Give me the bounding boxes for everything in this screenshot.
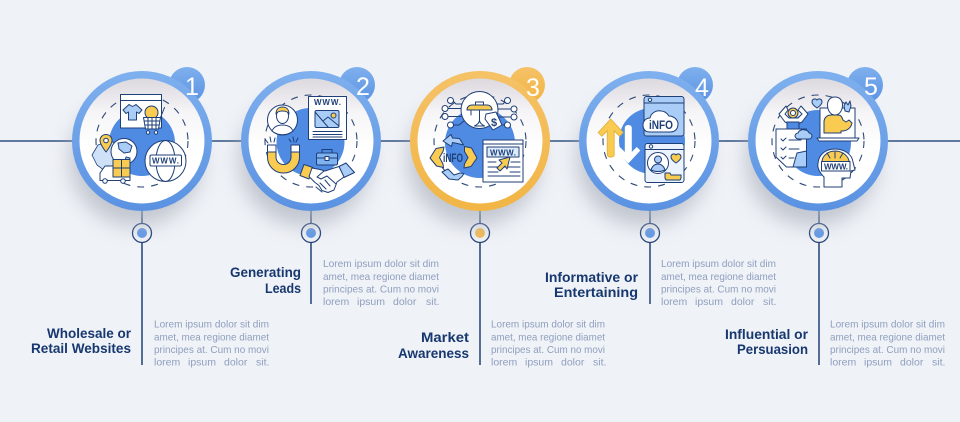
icon: map, pin and delivery truck: [92, 134, 137, 183]
step 3 body text: amet, mea regione diamet: [491, 332, 605, 344]
step 5 heading: [725, 326, 809, 357]
step 1 body text: [154, 318, 269, 368]
step 1: wholesale or retail websites: [31, 67, 269, 368]
step 1 body text: lorem: [154, 356, 181, 368]
step 3 body text: lorem: [491, 356, 518, 368]
step 2 circle: 2: [356, 73, 370, 101]
step 4 body text: principes at. Cum no movi: [661, 284, 776, 296]
icon: info cycle arrows: [430, 134, 477, 180]
step 3 body text: [491, 318, 606, 368]
icon: influencer on laptop: [812, 97, 859, 141]
step 2 body text: principes at. Cum no movi: [323, 284, 439, 296]
step 4 heading: Entertaining: [554, 284, 638, 300]
icon: info cycle arrows: iNFO: [443, 153, 463, 165]
step 2 body text: Lorem ipsum dolor sit dim: [323, 258, 439, 270]
timeline axis: [0, 140, 960, 142]
step 5 body text: [830, 318, 945, 368]
step 4 body text: [661, 258, 776, 308]
step 1 heading: Wholesale or: [47, 325, 132, 341]
step 5 body text: amet, mea regione diamet: [830, 332, 945, 344]
icon: www page: [308, 96, 346, 140]
step 2 body text: amet, mea regione diamet: [323, 271, 439, 283]
icon: thinking person with clipboard: [776, 106, 812, 167]
step 3 circle: 3: [526, 74, 540, 102]
step 1 body text: principes at. Cum no movi: [154, 344, 269, 356]
step 3 body text: dolor: [561, 356, 585, 368]
step 3 body text: principes at. Cum no movi: [491, 344, 605, 356]
step 5 body text: principes at. Cum no movi: [830, 344, 945, 356]
step 4 body text: dolor: [731, 296, 755, 308]
step 2 body text: lorem: [323, 296, 350, 308]
step 4 connector: [640, 205, 660, 304]
step 4 body text: lorem: [661, 296, 688, 308]
icon: product lamp with price tag and nodes: [442, 92, 517, 130]
step 4 heading: Informative or: [545, 269, 639, 285]
step 4 body text: ipsum: [695, 296, 723, 308]
step 5 heading: Influential or: [725, 326, 809, 342]
step 1 circle: 1: [185, 73, 199, 101]
step 3 heading: Market: [421, 329, 469, 345]
step 5 connector: [810, 205, 828, 365]
icon: handshake: [300, 163, 354, 192]
step 3 connector: [470, 205, 490, 365]
step 2 heading: Generating: [230, 264, 301, 280]
step 5 body text: Lorem ipsum dolor sit dim: [830, 318, 945, 330]
step 4 circle: 4: [695, 74, 709, 102]
step 5: influential or persuasion: [725, 67, 945, 368]
step 2 body text: sit.: [426, 296, 439, 308]
icon: globe www: [145, 140, 186, 182]
icon: product lamp with price tag and nodes: $: [491, 117, 497, 129]
step 3 circle: [408, 67, 550, 226]
step 1 body text: amet, mea regione diamet: [154, 332, 269, 344]
step 5 body text: dolor: [900, 356, 924, 368]
icon: briefcase: [316, 150, 338, 165]
step 4 body text: sit.: [763, 296, 776, 308]
step 1 body text: Lorem ipsum dolor sit dim: [154, 318, 269, 330]
icon: info cloud window: [643, 96, 684, 136]
icon: up arrow: [598, 119, 623, 157]
step 4 body text: amet, mea regione diamet: [661, 271, 776, 283]
icon: head with www and rating: WWW.: [824, 162, 848, 172]
step 3: market awareness: [398, 67, 606, 368]
step 3 body text: ipsum: [525, 356, 553, 368]
step 2 heading: Leads: [265, 280, 301, 296]
step 5 heading: Persuasion: [737, 341, 808, 357]
step 4 heading: [545, 269, 639, 300]
step 5 body text: ipsum: [864, 356, 892, 368]
icon: globe www: WWW.: [152, 156, 179, 166]
step 2 body text: [323, 258, 439, 308]
icon: profile window: [645, 144, 684, 182]
step 5 body text: sit.: [932, 356, 945, 368]
icon: info cloud window: iNFO: [649, 118, 673, 132]
step 2 body text: dolor: [393, 296, 417, 308]
step 4: informative or entertaining: [545, 67, 776, 308]
step 1 body text: dolor: [224, 356, 248, 368]
step 1 circle: [70, 67, 212, 226]
icon: magnet: [265, 137, 300, 173]
step 3 heading: Awareness: [398, 345, 469, 361]
step 3 heading: [398, 329, 469, 361]
step 1 body text: ipsum: [188, 356, 216, 368]
step 2: generating leads: [230, 67, 439, 308]
step 5 body text: lorem: [830, 356, 857, 368]
step 2 body text: ipsum: [357, 296, 385, 308]
step 2 connector: [302, 205, 320, 304]
step 1 connector: [132, 205, 152, 365]
step 2 circle: [239, 67, 381, 226]
step 1 heading: Retail Websites: [31, 340, 131, 356]
icon: www page with cursor: WWW.: [490, 148, 516, 158]
step 1 heading: [31, 325, 132, 356]
step 1 body text: sit.: [256, 356, 269, 368]
icon: person avatar: [268, 105, 298, 135]
icon: www page: WWW.: [314, 98, 341, 107]
step 5 circle: [746, 67, 888, 226]
step 4 circle: [577, 67, 719, 226]
icon: head with www and rating: [818, 149, 855, 187]
icon: www page with cursor: [483, 140, 523, 182]
step 4 body text: Lorem ipsum dolor sit dim: [661, 258, 776, 270]
step 3 body text: sit.: [593, 356, 606, 368]
step 5 circle: 5: [864, 73, 878, 101]
icon: browser with t-shirt and cart: [120, 94, 164, 134]
icon: down arrow: [616, 125, 640, 164]
step 2 heading: [230, 264, 301, 296]
step 3 body text: Lorem ipsum dolor sit dim: [491, 318, 605, 330]
